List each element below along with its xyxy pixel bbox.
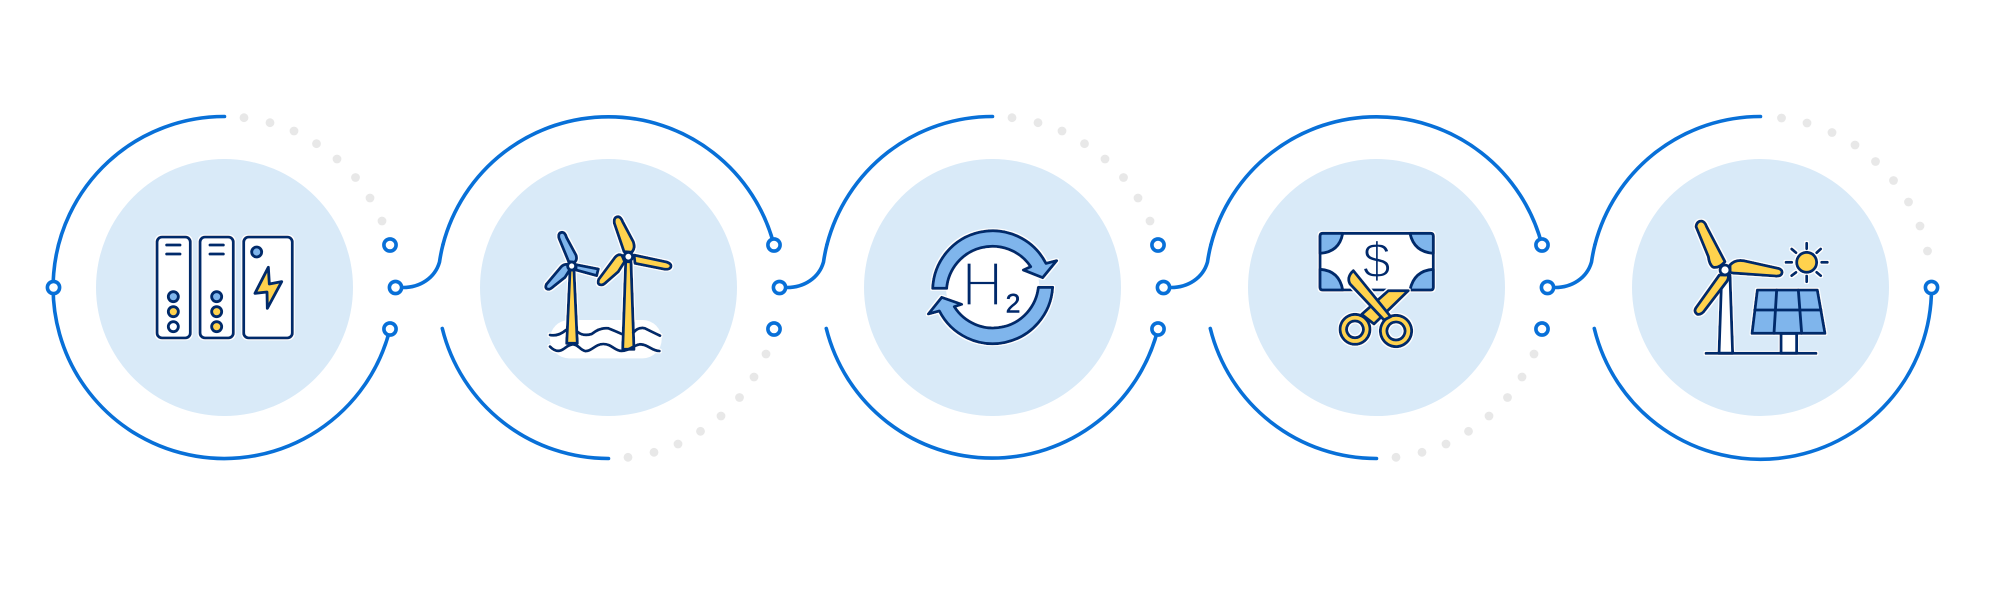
icon: offshore wind turbines [546,217,671,358]
icon: battery storage racks [157,237,292,338]
text: H2 formula: H [962,248,1003,319]
panel: step 5 renewable energy [1594,114,1938,459]
icon: scissors cutting banknote [1320,233,1433,347]
panel: step 4 cost reduction [1210,117,1548,462]
connector: step 4 to step 5 [1541,244,1595,294]
connector: step 3 to step 4 [1157,244,1211,294]
icon: wind turbine, solar panel and sun [1695,221,1827,353]
icon: hydrogen recycling arrows [928,231,1057,344]
text: H2 formula: 2 [1006,289,1020,319]
connector: step 2 to step 3 [773,244,827,294]
panel: step 1 energy storage [47,113,396,458]
text: dollar sign: $ [1363,233,1391,289]
connector: step 1 to step 2 [389,244,443,294]
panel: step 2 offshore wind [442,117,780,462]
panel: step 3 hydrogen cycle [826,113,1164,458]
